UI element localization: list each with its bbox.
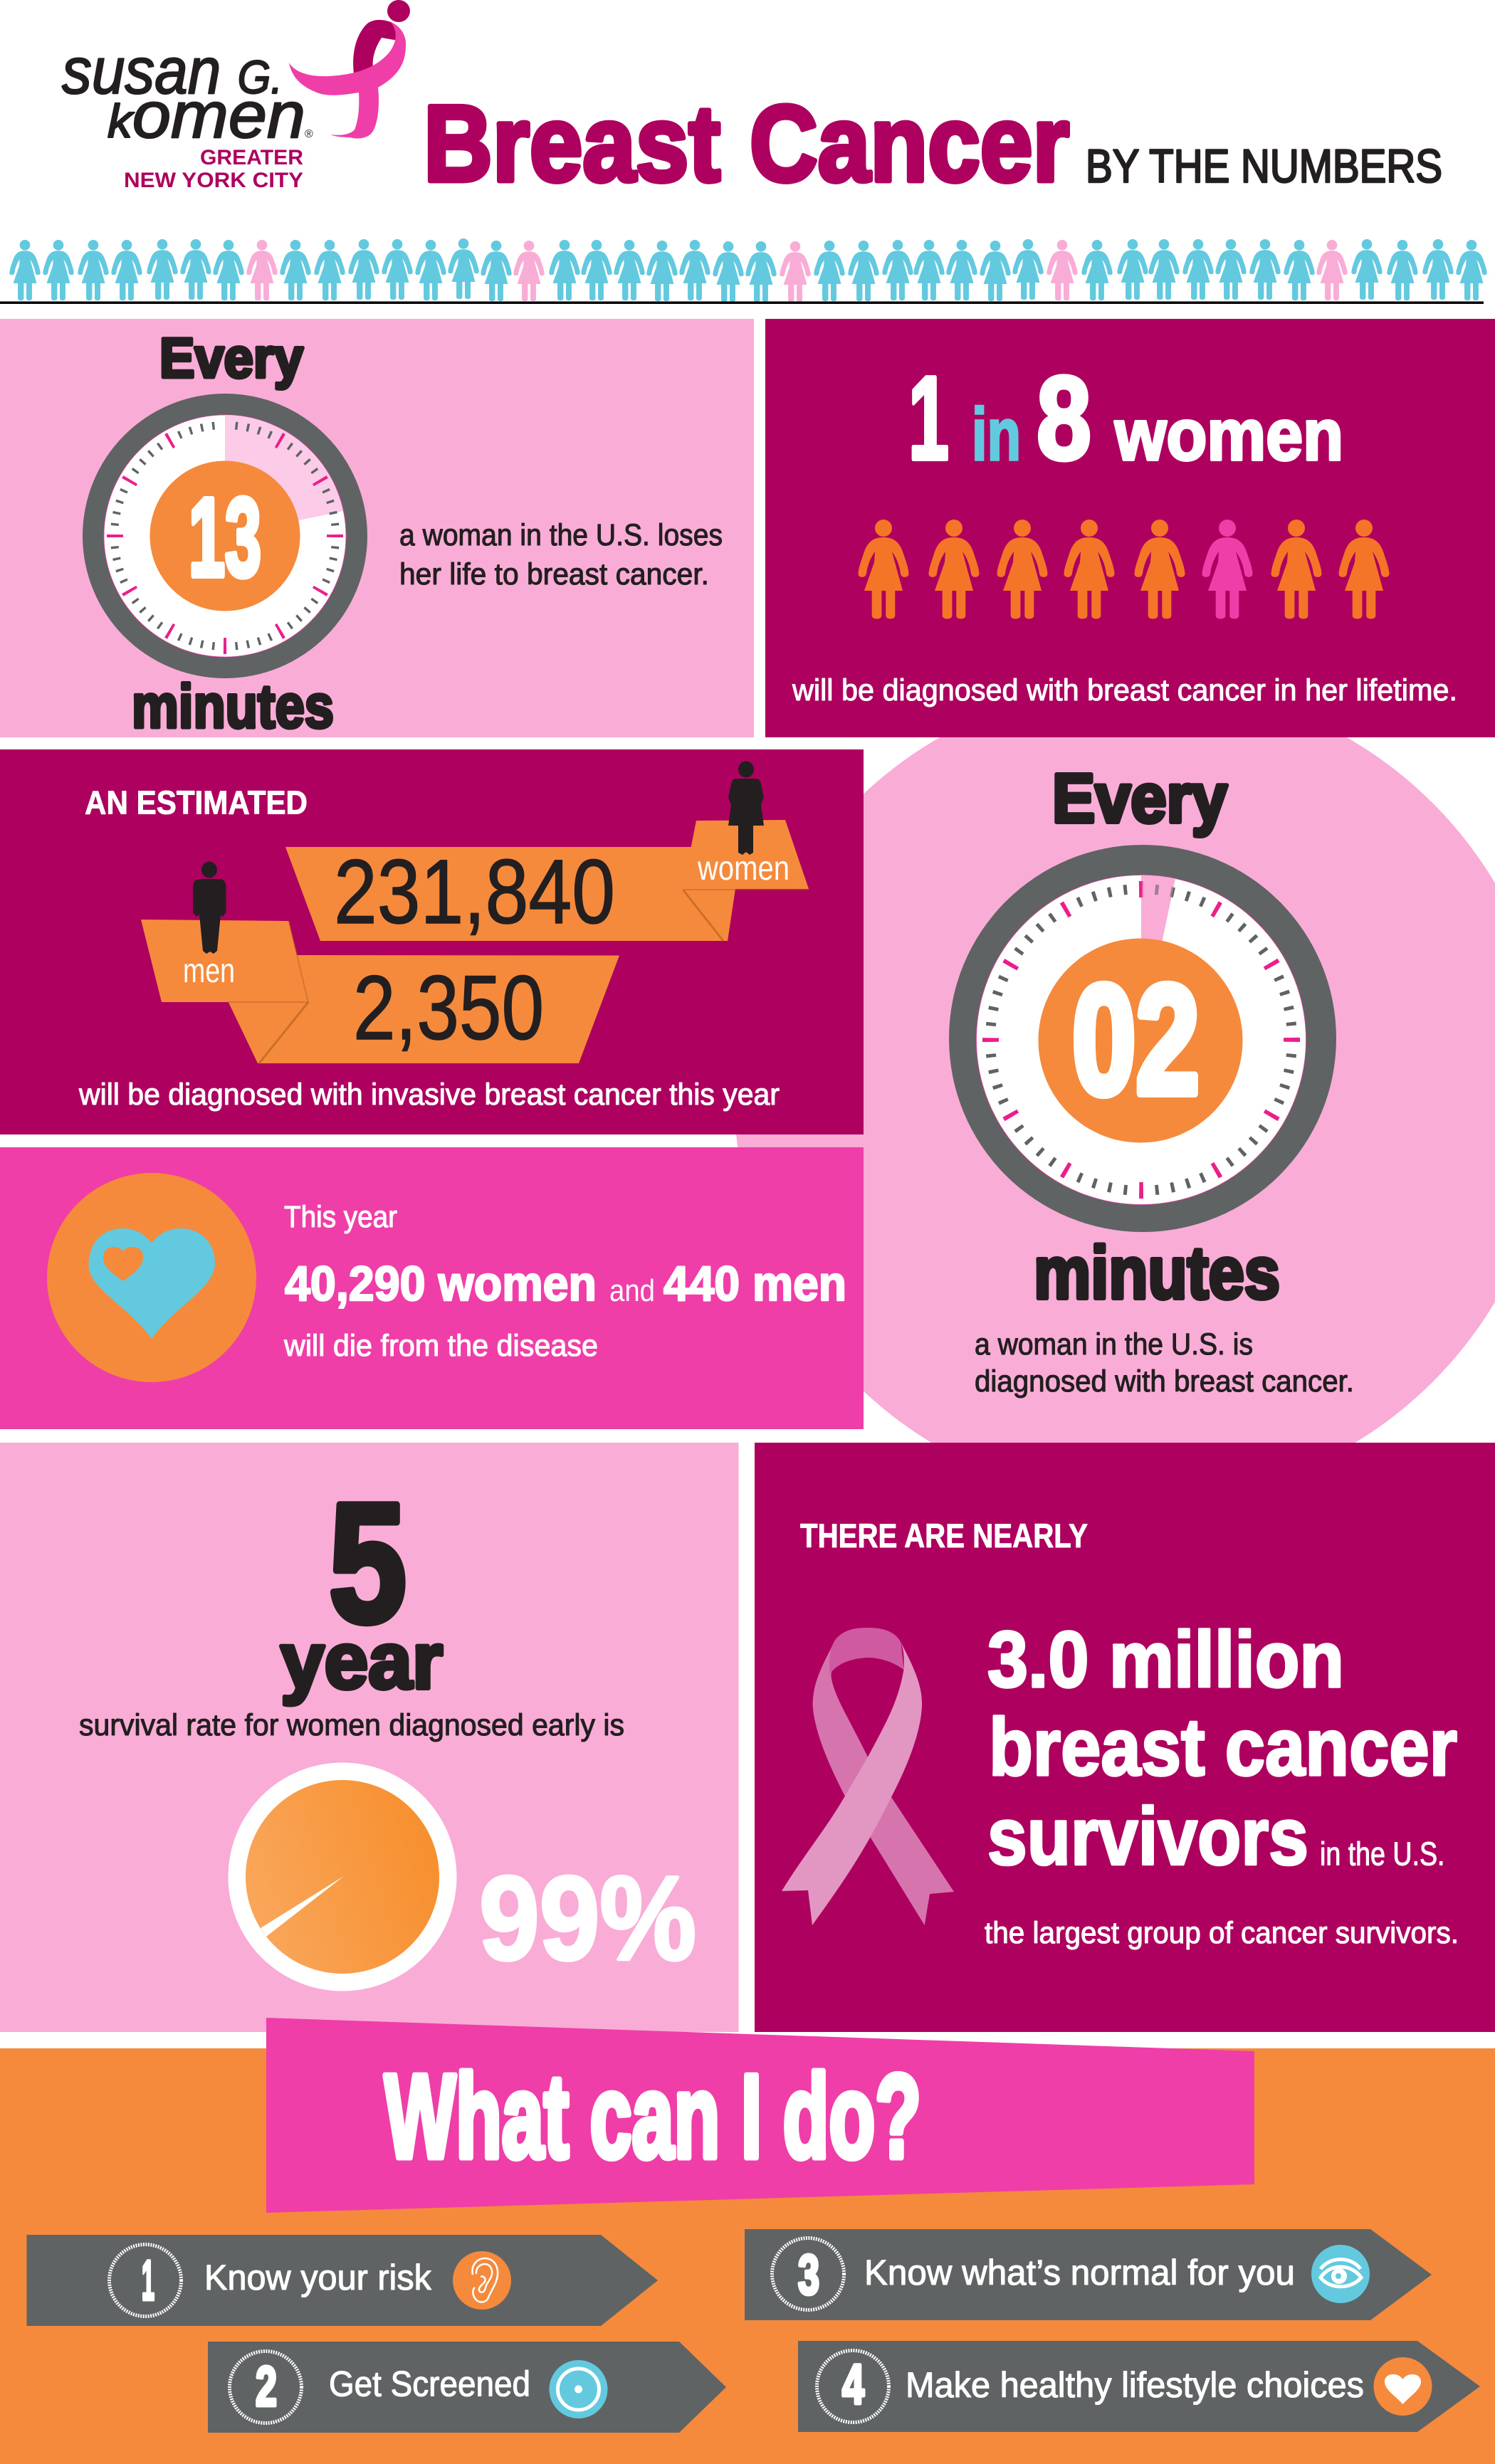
panel: every 13 minutes [0,319,754,741]
heading: Every: Every [1052,759,1227,837]
stat: 99%: 99% [479,1851,696,1985]
ribbon: 2,350 men: men [183,952,235,990]
title [424,83,1442,204]
icon: woman [728,762,764,855]
arrow: step 2 get screened [208,2342,726,2433]
stat: 3.0 million breast cancer survivors: survivors [987,1792,1308,1882]
text: 40,290 women and 440 men: This year [284,1200,397,1234]
heading: 1 in 8 women [908,352,1343,485]
arrow: step 4 healthy lifestyle: 4 [842,2352,864,2416]
banner: what can I do [266,2018,1254,2213]
heading: Every: Every [159,326,303,389]
icon: target [550,2360,608,2418]
banner: what can I do: What can I do? [384,2050,921,2183]
ribbon: 2,350 men: 2,350 [353,957,544,1059]
arrow: step 2 get screened: 2 [256,2354,277,2418]
logo: Susan G. Komen Greater New York City: susan G. [62,35,283,107]
icon: heart in circle [47,1173,256,1382]
arrow: step 2 get screened: Get Screened [329,2364,530,2404]
arrow: step 4 healthy lifestyle [798,2341,1480,2432]
heading: minutes: minutes [1034,1232,1280,1315]
heading: 1 in 8 women: in [972,394,1021,476]
text: 40,290 women and 440 men: 40,290 women [285,1256,597,1311]
text: 40,290 women and 440 men: will die from the disease [283,1329,598,1363]
icon: ear [453,2251,511,2310]
text: 40,290 women and 440 men: and [609,1273,655,1308]
text: lifetime: will be diagnosed with breast cancer in her lifetime. [792,673,1457,707]
ribbon: 231,840 women [285,820,809,943]
heading: 5 year [280,1469,443,1705]
icon: man [193,861,226,954]
chart: 99 percent pie [228,1762,457,1991]
heading: minutes: minutes [132,673,334,741]
icon row: eight women [858,520,1390,619]
text: diagnosed with breast cancer [975,1327,1354,1399]
panel: an estimated [0,749,864,1134]
stat: 3.0 million breast cancer survivors: 3.0 million [987,1616,1344,1704]
heading: 1 in 8 women: women [1114,394,1343,475]
text: 40,290 women and 440 men: 440 men [663,1256,846,1311]
text: loses her life: her life to breast cancer. [399,557,709,591]
clock: 02 minutes [949,845,1336,1232]
clock: 13 minutes [83,394,367,678]
text: 40,290 women and 440 men [283,1200,846,1363]
stat: 3.0 million breast cancer survivors [987,1616,1457,1882]
ribbon: 2,350 men [141,920,619,1063]
text: diagnosed with breast cancer: diagnosed with breast cancer. [975,1364,1354,1399]
logo: Susan G. Komen Greater New York City: NEW YORK CITY [124,169,303,192]
title: Breast [424,83,720,204]
text: survival rate: survival rate for women diagnosed early is [79,1708,624,1742]
panel: every 2 minutes background circle [734,683,1495,1502]
stat: 3.0 million breast cancer survivors: in the U.S. [1320,1835,1445,1872]
text: loses her life [399,518,723,591]
arrow: step 3 know what's normal [745,2229,1432,2320]
panel: 5 year survival [0,1443,739,2032]
text: diagnosed with breast cancer: a woman in the U.S. is [975,1327,1253,1362]
arrow: step 1 know your risk: Know your risk [204,2258,432,2297]
arrow: step 3 know what's normal: 3 [798,2243,819,2306]
panel: deaths this year [0,1147,864,1429]
clock: 13 minutes: 13 [189,475,261,600]
panel: every 2 minutes content [949,759,1354,1399]
heading: an estimated: AN ESTIMATED [85,784,308,821]
text: largest group: the largest group of cancer survivors. [985,1916,1459,1950]
heading: 5 year: year [280,1616,443,1705]
logo: Susan G. Komen Greater New York City [62,0,410,192]
arrow: step 3 know what's normal: Know what’s normal for you [864,2253,1295,2292]
heading: there are nearly: THERE ARE NEARLY [800,1517,1088,1554]
arrow: step 1 know your risk: 1 [142,2248,154,2312]
icon: eye [1311,2245,1370,2303]
clock: 02 minutes: 02 [1072,954,1200,1127]
logo: Susan G. Komen Greater New York City: GREATER [200,146,303,169]
icon: heart [1374,2357,1432,2416]
heading: 5 year: 5 [329,1469,406,1658]
panel: 1 in 8 women [765,319,1495,737]
text: invasive breast cancer: will be diagnosed with invasive breast cancer this year [78,1078,780,1112]
ribbon: 231,840 women: women [697,850,790,888]
ribbon: 231,840 women: 231,840 [334,841,615,943]
arrow: step 1 know your risk [27,2235,658,2326]
arrow: step 4 healthy lifestyle: Make healthy lifestyle choices [906,2365,1364,2405]
title: Cancer [750,83,1069,204]
heading: 1 in 8 women: 1 [908,352,949,485]
text: loses her life: a woman in the U.S. loses [399,518,723,552]
logo: Susan G. Komen Greater New York City: komen [107,79,305,152]
panel: what can I do [0,2018,1495,2464]
row of women figures [0,238,1487,304]
title: BY THE NUMBERS [1086,139,1442,192]
heading: 1 in 8 women: 8 [1037,352,1091,485]
icon: pink ribbon [782,1628,954,1925]
panel: survivors [755,1443,1495,2032]
logo: Susan G. Komen Greater New York City: ® [305,128,313,140]
